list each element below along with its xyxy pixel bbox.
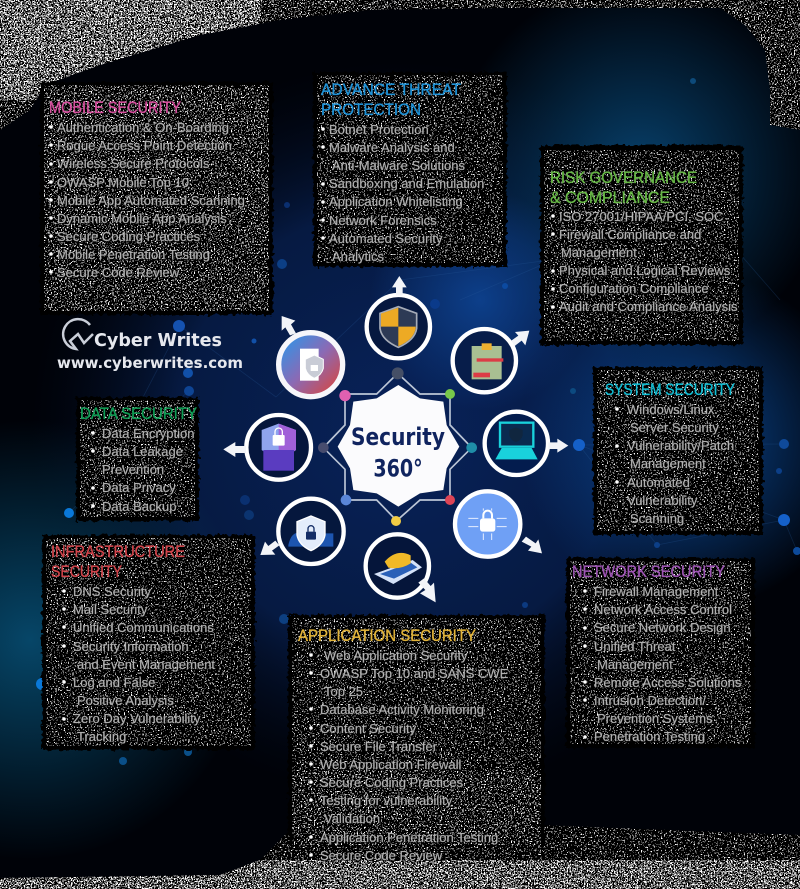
- arrow: down left: [260, 541, 279, 555]
- list: system security: [615, 402, 734, 526]
- list: application security: OWASP Top 10 and SANS CWE: [320, 666, 509, 681]
- list: risk governance: Firewall Compliance and: [559, 227, 701, 242]
- icon: card and shield, application: [366, 534, 429, 598]
- list: application security: Secure Coding Practices: [320, 775, 464, 790]
- list: application security: Web Application Firewall: [320, 757, 461, 772]
- list: risk governance: Physical and Logical Reviews: [559, 263, 731, 278]
- list: system security: Scanning: [630, 511, 684, 526]
- list: application security: Secure File Transfer: [320, 739, 438, 754]
- icon: laptop, system: [485, 412, 548, 475]
- arrow: right: [548, 439, 568, 453]
- heading: system security: SYSTEM SECURITY: [605, 380, 735, 399]
- list: network security: [583, 584, 742, 744]
- list: infrastructure security: Mail Security: [73, 602, 148, 617]
- icon: shield with devices, infrastructure: [278, 499, 344, 564]
- panel: infrastructure security: [42, 535, 255, 750]
- list: network security: Intrusion Detection/: [594, 693, 706, 708]
- list: advance threat protection: Application Whitelisting: [329, 194, 463, 209]
- circuit lines: [323, 373, 472, 521]
- arrow: left: [223, 442, 246, 457]
- hub: security 360 badge: [338, 385, 459, 507]
- list: mobile security: Dynamic Mobile App Analysis: [57, 211, 227, 226]
- list: infrastructure security: DNS Security: [73, 584, 152, 599]
- heading: advance threat protection: PROTECTION: [321, 100, 421, 119]
- list: advance threat protection: Network Forensics: [329, 213, 437, 228]
- list: data security: [91, 426, 194, 514]
- panel: system security: [593, 367, 763, 535]
- icon: chip lock, network: [455, 491, 520, 557]
- heading: application security: APPLICATION SECURITY: [298, 626, 476, 645]
- list: mobile security: [49, 120, 245, 280]
- list: risk governance: Management: [561, 245, 637, 260]
- list: risk governance: ISO 27001/HIPAA/PCI, SOC: [559, 209, 724, 224]
- list: infrastructure security: Log and False: [73, 675, 155, 690]
- heading: network security: NETWORK SECURITY: [572, 562, 725, 581]
- list: network security: Secure Network Design: [594, 620, 731, 635]
- list: advance threat protection: Botnet Protection: [329, 122, 429, 137]
- list: application security: Application Penetration Testing: [320, 830, 498, 845]
- list: infrastructure security: and Event Management: [77, 657, 215, 672]
- list: mobile security: Rogue Access Point Detection: [57, 138, 232, 153]
- hub: security 360 badge: 360°: [373, 455, 423, 483]
- arrow: down right 2: [418, 578, 436, 602]
- arrow: down right: [522, 537, 542, 553]
- list: mobile security: Mobile App Automated Scanning: [57, 193, 245, 208]
- list: application security: Top 25: [324, 684, 363, 699]
- list: data security: Data Leakage: [102, 444, 183, 459]
- list: mobile security: OWASP Mobile Top 10: [57, 175, 189, 190]
- list: data security: Data Backup: [102, 499, 176, 514]
- central diagram: security 360: [223, 276, 568, 602]
- list: infrastructure security: [62, 584, 215, 744]
- list: infrastructure security: Security Information: [73, 639, 189, 654]
- icon: clipboard, risk: [453, 329, 516, 392]
- list: mobile security: Secure Code Review: [57, 265, 180, 280]
- panel: risk governance and compliance: [540, 145, 743, 345]
- list: application security: Secure Code Review: [320, 848, 443, 863]
- list: mobile security: Authentication & On-Boarding: [57, 120, 229, 135]
- list: advance threat protection: [321, 122, 484, 264]
- heading: infrastructure security: INFRASTRUCTURE: [51, 542, 185, 561]
- list: infrastructure security: Tracking: [77, 729, 126, 744]
- list: system security: Windows/Linux: [627, 402, 715, 417]
- list: system security: Automated: [627, 475, 690, 490]
- heading: risk governance: RISK GOVERNANCE: [550, 168, 697, 187]
- list: application security: Testing for vulnerability: [320, 793, 453, 808]
- icon: phone shield, mobile: [279, 333, 343, 397]
- list: application security: Validation: [324, 811, 380, 826]
- list: advance threat protection: Malware Analysis and: [329, 140, 455, 155]
- list: application security: Web Application Security: [324, 648, 468, 663]
- list: risk governance: [551, 209, 738, 314]
- panel: advance threat protection: [313, 72, 507, 267]
- list: risk governance: Audit and Compliance Analysis: [559, 299, 738, 314]
- list: advance threat protection: Anti-Malware Solutions: [332, 158, 465, 173]
- list: data security: Prevention: [102, 462, 164, 477]
- list: system security: Management: [630, 456, 706, 471]
- icon: locked data: [246, 415, 311, 480]
- list: infrastructure security: Zero Day Vulnerability: [73, 711, 201, 726]
- list: advance threat protection: Sandboxing and Emulation: [329, 176, 484, 191]
- arrow: up right: [511, 331, 529, 346]
- list: network security: Management: [597, 657, 673, 672]
- list: mobile security: Secure Coding Practices: [57, 229, 201, 244]
- list: network security: Network Access Control: [594, 602, 732, 617]
- heading: advance threat protection: ADVANCE THREAT: [321, 80, 461, 99]
- list: system security: Vulnerability/Patch: [627, 438, 734, 453]
- list: network security: Prevention Systems: [597, 711, 713, 726]
- panel: network security: [566, 558, 755, 748]
- list: mobile security: Mobile Penetration Testing: [57, 247, 210, 262]
- list: system security: Vulnerability: [627, 493, 698, 508]
- list: advance threat protection: Automated Security: [329, 231, 443, 246]
- arrow: up: [392, 276, 407, 295]
- list: network security: Unified Threat: [594, 639, 676, 654]
- panel: application security: [288, 615, 545, 863]
- list: network security: Penetration Testing: [594, 729, 705, 744]
- icon: shield, advance threat: [367, 295, 430, 358]
- connector nodes: [318, 367, 477, 526]
- list: data security: Data Privacy: [102, 480, 176, 495]
- arrow: up left: [282, 316, 296, 335]
- list: data security: Data Encryption: [102, 426, 194, 441]
- heading: data security: DATA SECURITY: [80, 404, 197, 423]
- speckled noise: bottom edge: [0, 825, 800, 889]
- logo: cyber writes: Cyber Writes: [94, 330, 222, 351]
- hub: security 360 badge: Security: [351, 423, 445, 451]
- list: advance threat protection: Analytics: [332, 249, 385, 264]
- speckled noise: top edge: [0, 0, 800, 130]
- panel: mobile security: [40, 82, 273, 315]
- heading: mobile security: MOBILE SECURITY: [49, 98, 181, 117]
- heading: risk governance: & COMPLIANCE: [550, 188, 670, 207]
- heading: infrastructure security: SECURITY: [51, 562, 122, 581]
- list: mobile security: Wireless Secure Protocols: [57, 156, 210, 171]
- logo: cyber writes: [57, 319, 243, 372]
- list: infrastructure security: Positive Analysis: [77, 693, 174, 708]
- list: infrastructure security: Unified Communications: [73, 620, 214, 635]
- icon: cyber writes mark: [63, 319, 93, 349]
- logo: cyber writes: www.cyberwrites.com: [57, 354, 243, 372]
- list: application security: Content Security: [320, 721, 417, 736]
- list: application security: Database Activity Monitoring: [320, 702, 484, 717]
- list: application security: [309, 648, 509, 863]
- list: network security: Firewall Management: [594, 584, 719, 599]
- panel: data security: [76, 397, 199, 521]
- list: network security: Remote Access Solutions: [594, 675, 742, 690]
- list: risk governance: Configuration Compliance: [559, 281, 709, 296]
- list: system security: Server Security: [630, 420, 719, 435]
